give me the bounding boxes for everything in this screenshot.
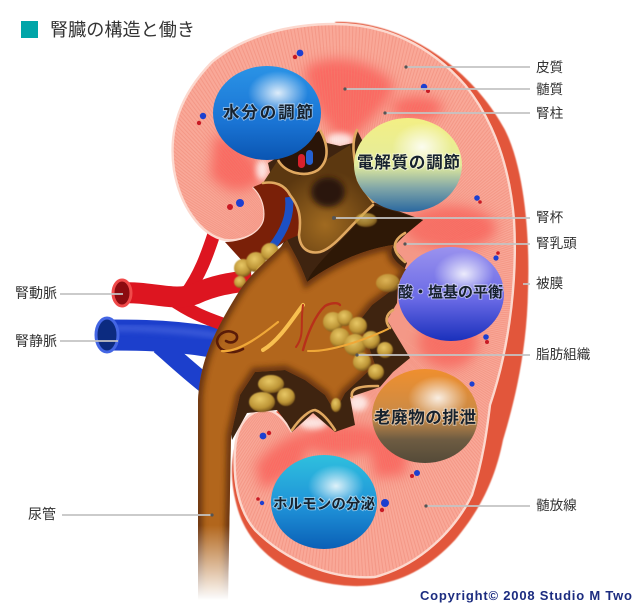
- labels left: 腎静脈: [15, 333, 57, 349]
- labels right: 腎乳頭: [536, 236, 577, 251]
- renal artery: [113, 234, 252, 326]
- labels right: [536, 60, 591, 513]
- medulla pyramids: [210, 59, 496, 490]
- small vessel cross-sections: [197, 50, 500, 512]
- sphere: waste excretion: [372, 369, 478, 463]
- dark spot: [311, 177, 345, 207]
- cortex fill: [173, 24, 515, 577]
- labels left: 腎動脈: [15, 285, 57, 301]
- ureter fade: [190, 525, 235, 600]
- labels right: 腎杯: [536, 210, 564, 225]
- sphere: hormone secretion: ホルモンの分泌: [273, 496, 376, 513]
- cortex outline: [173, 24, 515, 577]
- main renal pelvis: [198, 240, 407, 600]
- sphere: hormone secretion: [271, 455, 377, 549]
- renal sinus: [190, 130, 423, 600]
- fat upper left: [234, 243, 279, 288]
- leader lines: [60, 65, 530, 517]
- labels left: 尿管: [28, 506, 56, 522]
- minor calyx with vessels: [278, 130, 327, 174]
- radial stripes: [155, 110, 535, 490]
- sphere: acid-base balance: 酸・塩基の平衡: [398, 283, 503, 301]
- labels right: 脂肪組織: [536, 347, 591, 362]
- labels left: [15, 285, 57, 522]
- sphere: electrolyte regulation: [354, 118, 462, 212]
- fat lower clusters: [249, 213, 400, 412]
- renal vein: [96, 318, 228, 386]
- pelvis edge shading: [198, 240, 407, 600]
- capsule: [232, 22, 528, 586]
- sphere: water regulation: 水分の調節: [223, 102, 313, 122]
- labels right: 腎柱: [536, 106, 564, 121]
- blood vessels: [96, 234, 252, 386]
- blue vessel in hilum: [272, 197, 289, 247]
- sphere: electrolyte regulation: 電解質の調節: [357, 152, 460, 172]
- dark wedge: [307, 205, 423, 282]
- labels right: 髄質: [536, 82, 563, 97]
- sphere: acid-base balance: [398, 247, 504, 341]
- calyx tan outlines: [263, 130, 405, 430]
- labels right: 髄放線: [536, 498, 577, 513]
- labels right: 皮質: [536, 60, 563, 75]
- sinus cavity: [225, 130, 423, 440]
- M logo: [217, 303, 388, 352]
- hilum dark tissue: [225, 182, 300, 264]
- calyx interior: [263, 145, 373, 252]
- labels right: 被膜: [536, 276, 563, 291]
- title: 腎臓の構造と働き: [50, 20, 195, 40]
- copyright: Copyright© 2008 Studio M Two: [420, 588, 632, 603]
- sphere: water regulation: [213, 66, 321, 160]
- papilla highlights: [256, 133, 368, 429]
- sphere: waste excretion: 老廃物の排泄: [374, 408, 476, 427]
- kidney cortex: [155, 22, 535, 586]
